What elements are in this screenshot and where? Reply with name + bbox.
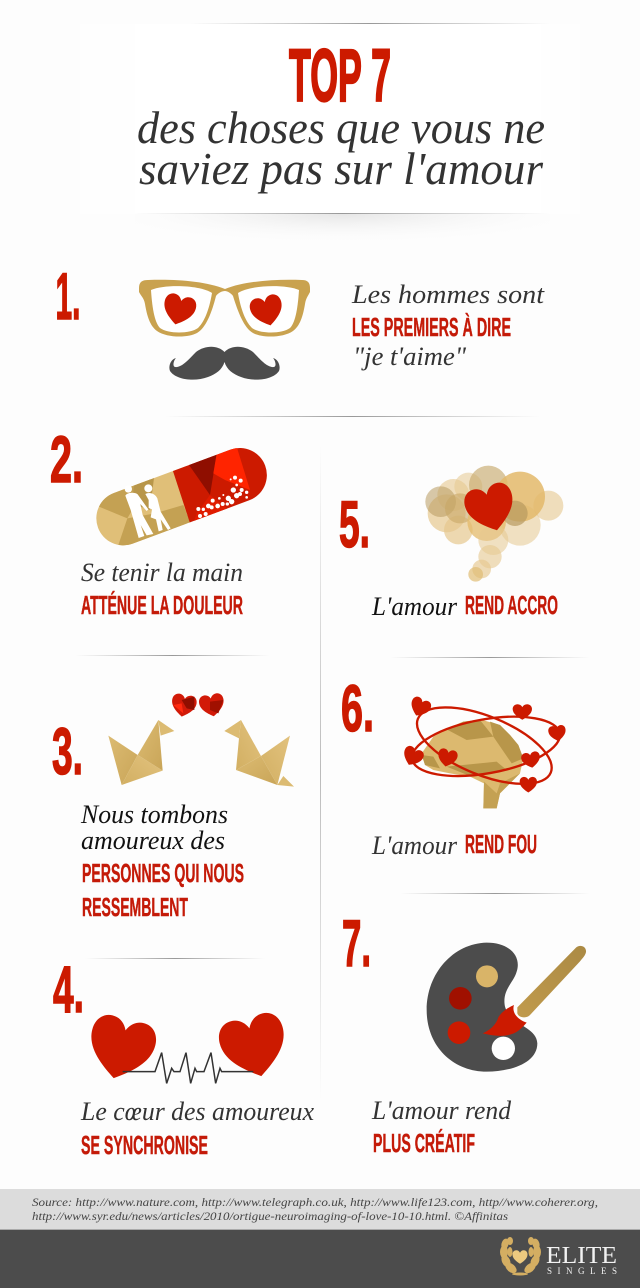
text: item 3: amoureux des bbox=[81, 826, 225, 855]
man and woman silhouettes bbox=[125, 484, 171, 538]
text: item 6 bbox=[371, 829, 537, 860]
panel: item 7 bbox=[342, 906, 586, 1158]
logo: elite singles: SINGLES bbox=[547, 1266, 617, 1276]
panel: footer bbox=[0, 1230, 640, 1288]
panel: item 5 bbox=[339, 466, 563, 621]
text: item 4: SE SYNCHRONISE bbox=[81, 1130, 208, 1160]
number 3: 3. bbox=[52, 714, 83, 788]
text: item 7 bbox=[371, 1096, 512, 1158]
panel: item 2 bbox=[50, 435, 267, 614]
text: item 2 bbox=[81, 558, 243, 620]
hearts bbox=[170, 692, 226, 719]
text: item 1: LES PREMIERS À DIRE bbox=[352, 312, 511, 342]
panel: title bbox=[135, 23, 550, 214]
text: item 4 bbox=[80, 1097, 314, 1160]
text: item 4: Le cœur des amoureux bbox=[80, 1097, 314, 1126]
panel: title: TOP 7 bbox=[289, 34, 391, 117]
icon: brain with orbiting hearts bbox=[400, 692, 567, 808]
icon: bubble brain with heart bbox=[425, 466, 563, 582]
icon: moustache bbox=[169, 347, 280, 380]
icon: pill with couple bbox=[96, 448, 267, 546]
logo: elite singles: ELITE bbox=[546, 1243, 617, 1269]
panel: item 3 bbox=[52, 692, 294, 922]
text: item 7: PLUS CRÉATIF bbox=[373, 1128, 475, 1158]
number 7: 7. bbox=[342, 906, 371, 980]
number 5: 5. bbox=[339, 487, 370, 561]
number 4: 4. bbox=[53, 952, 84, 1026]
panel: item 4 bbox=[53, 952, 314, 1160]
text: item 3 bbox=[80, 800, 244, 922]
text: item 7: L'amour rend bbox=[371, 1096, 512, 1125]
text: item 1: Les hommes sont bbox=[351, 280, 545, 309]
panel: item 1 bbox=[56, 259, 545, 380]
text: item 1 bbox=[351, 280, 545, 371]
source text: http://www.syr.edu/news/articles/2010/ortigue-neuroimaging-of-love-10-10.html. ©Affinitas bbox=[32, 1209, 508, 1223]
source text: Source: http://www.nature.com, http://www.telegraph.co.uk, http://www.life123.com, http//www.coherer.org, bbox=[32, 1195, 598, 1209]
text: item 5: L'amour bbox=[371, 592, 458, 621]
panel: item 1: 1. bbox=[56, 259, 80, 333]
text: item 3: PERSONNES QUI NOUS bbox=[82, 858, 244, 888]
subtitle bbox=[137, 102, 545, 194]
text: item 2: Se tenir la main bbox=[81, 558, 243, 587]
icon: synchronised hearts bbox=[82, 1009, 293, 1086]
text: item 5 bbox=[371, 590, 558, 621]
right bird bbox=[224, 720, 294, 787]
left bird bbox=[108, 720, 174, 785]
text: item 3: Nous tombons bbox=[80, 800, 228, 829]
number 6: 6. bbox=[341, 671, 374, 745]
panel: source band bbox=[0, 1189, 640, 1230]
text: item 5: REND ACCRO bbox=[465, 590, 558, 620]
icon: laurel wreath bbox=[500, 1237, 541, 1276]
subtitle: des choses que vous ne bbox=[137, 102, 545, 153]
text: item 6: L'amour bbox=[371, 831, 458, 860]
dots bbox=[196, 476, 248, 518]
text: item 2: ATTÉNUE LA DOULEUR bbox=[81, 590, 243, 620]
text: item 1: "je t'aime" bbox=[353, 342, 466, 371]
logo: elite singles bbox=[500, 1237, 617, 1276]
panel: item 6 bbox=[341, 671, 567, 860]
text: item 6: REND FOU bbox=[465, 829, 537, 859]
number 2: 2. bbox=[50, 422, 83, 496]
text: item 3: RESSEMBLENT bbox=[82, 892, 188, 922]
icon: origami birds and hearts bbox=[108, 692, 294, 787]
icon: palette and brush bbox=[427, 943, 586, 1072]
icon: glasses with hearts bbox=[139, 280, 310, 337]
source text bbox=[32, 1195, 598, 1223]
subtitle: saviez pas sur l'amour bbox=[139, 143, 544, 194]
